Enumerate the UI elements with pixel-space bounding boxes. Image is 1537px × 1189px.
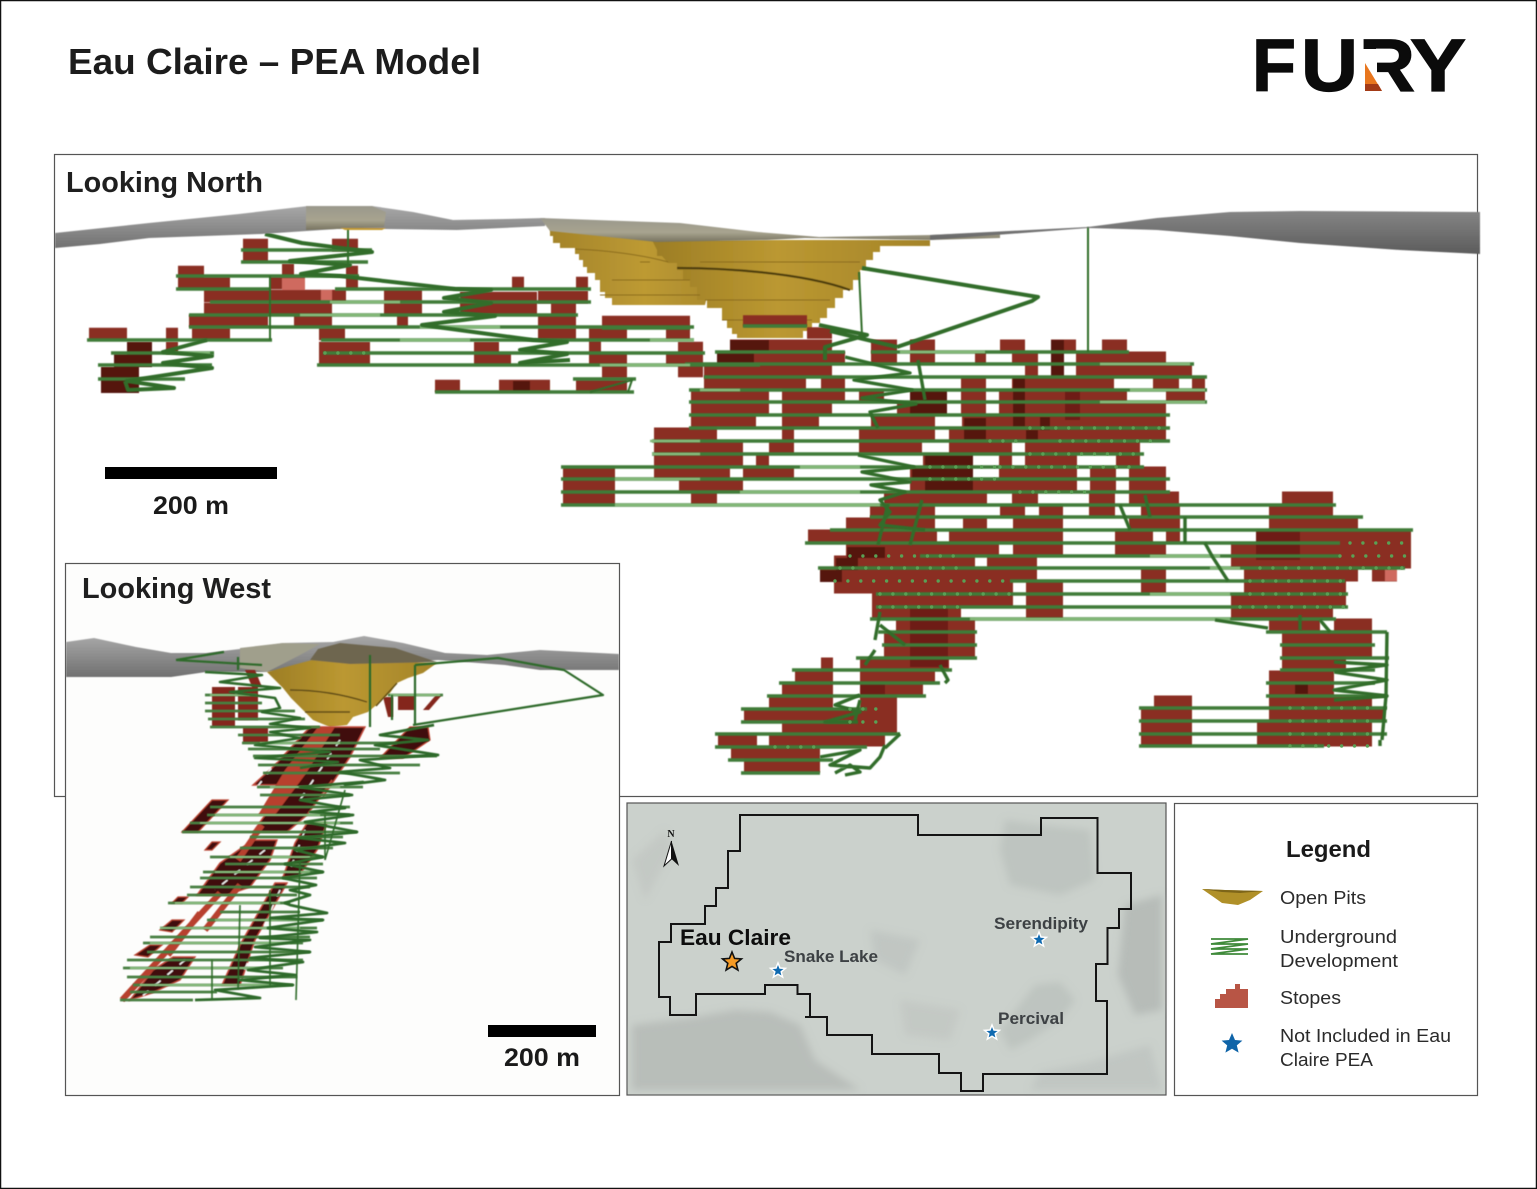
map marker: Percival: Percival: [998, 1009, 1064, 1028]
legend heading: Legend: [1286, 836, 1371, 862]
heading: looking north: Looking North: [66, 167, 263, 199]
panel: looking north: [54, 154, 1480, 796]
stopes: west view upper groups: [212, 670, 442, 743]
panel: looking west: [66, 564, 620, 1096]
legend item: underground development: Development: [1280, 950, 1398, 971]
map marker: Percival: [985, 1009, 1064, 1039]
legend item: underground development: Underground: [1280, 926, 1397, 947]
logo: Fury: R: [1359, 24, 1415, 107]
logo: Fury: F: [1252, 24, 1296, 107]
stope drill dots: north view: [325, 353, 1405, 747]
scale bar: west view: [488, 1025, 596, 1072]
map marker: Serendipity: Serendipity: [994, 914, 1089, 933]
underground development: west view ramps: [176, 652, 603, 1000]
logo: Fury: U: [1301, 24, 1358, 107]
map lakes and terrain: [632, 820, 1162, 1090]
panel: location map: [627, 803, 1166, 1095]
open pits: north view: [550, 228, 930, 338]
icon: north arrow: [664, 829, 679, 866]
legend item: not included in PEA: Not Included in Eau: [1280, 1025, 1451, 1046]
legend item: open pits: Open Pits: [1280, 887, 1366, 908]
stopes: north view: [89, 245, 1411, 766]
legend item: stopes: Stopes: [1280, 987, 1341, 1008]
underground development: west view levels: [120, 695, 443, 1000]
map marker: Eau Claire: Eau Claire: [680, 925, 791, 950]
open pit: west view: [267, 643, 437, 727]
panel: legend: [1174, 804, 1478, 1096]
dark and light stope shading: [101, 340, 1308, 694]
map marker: Eau Claire: [680, 925, 791, 970]
scale bar: north view: 200 m: [153, 492, 229, 520]
icon: north arrow: N: [667, 829, 675, 840]
legend item: not included in PEA: [1222, 1025, 1451, 1070]
underground development: north view ramps: [125, 227, 1387, 775]
terrain surface: west view: [66, 636, 619, 677]
legend item: not included in PEA: Claire PEA: [1280, 1049, 1374, 1070]
map marker: Serendipity: [994, 914, 1089, 946]
stopes: west view ore bands: [122, 727, 430, 1000]
legend item: underground development: [1211, 926, 1398, 971]
underground development: north view levels: [87, 250, 1413, 773]
map marker: Snake Lake: Snake Lake: [784, 947, 878, 966]
title: Eau Claire – PEA Model: [68, 41, 481, 82]
legend item: stopes: [1215, 984, 1341, 1008]
heading: looking west: Looking West: [82, 573, 271, 605]
logo: Fury: [1252, 24, 1466, 107]
scale bar: north view: [105, 467, 277, 520]
map marker: Snake Lake: [771, 947, 878, 977]
legend item: open pits: [1202, 887, 1366, 908]
logo: Fury: Y: [1410, 24, 1466, 107]
scale bar: west view: 200 m: [504, 1044, 580, 1072]
property boundary: [659, 815, 1131, 1091]
terrain surface: north view: [55, 206, 1480, 254]
